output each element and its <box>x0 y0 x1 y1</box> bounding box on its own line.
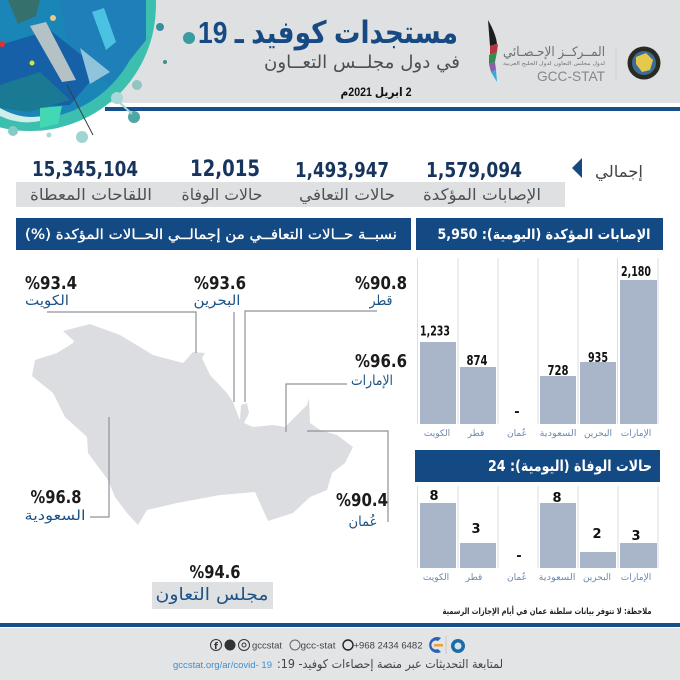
bar chart: daily deaths: البحرين <box>583 573 611 583</box>
stat: vaccines: 15,345,104 <box>32 157 138 181</box>
map: GCC countries <box>32 324 353 525</box>
bar chart: daily confirmed cases: الكويت <box>424 429 450 439</box>
footer: link line <box>173 657 503 672</box>
bar chart: daily confirmed cases <box>418 258 658 439</box>
label: Kuwait: %93.4 <box>25 273 77 294</box>
bar chart: daily deaths: 8 <box>552 491 562 506</box>
leader lines <box>47 311 388 522</box>
panel heading: daily cases <box>416 218 663 250</box>
footer: link line: gccstat.org/ar/covid- 19 <box>173 660 272 671</box>
label: GCC total: مجلس التعاون <box>156 585 268 605</box>
date: 2 ابريل 2021م <box>340 85 412 100</box>
bar chart: daily confirmed cases: 728 <box>548 364 568 379</box>
label: Oman <box>336 490 388 530</box>
footer: contact line <box>252 640 422 652</box>
logo: GCC-STAT ribbon <box>488 20 498 82</box>
panel heading: daily deaths <box>415 450 660 482</box>
footer: social icons <box>210 640 353 652</box>
totals label <box>572 158 643 182</box>
label: UAE: %96.6 <box>355 351 407 372</box>
stat: vaccines <box>30 157 152 204</box>
bar chart: daily confirmed cases: - <box>514 405 520 420</box>
label: Qatar: %90.8 <box>355 273 407 294</box>
bar chart: daily deaths: قطر <box>465 573 482 583</box>
bar chart: daily deaths: السعودية <box>538 573 576 583</box>
subtitle: في دول مجلــس التعــاون <box>264 52 460 73</box>
label: Oman: عُمان <box>348 514 378 530</box>
totals grey band <box>16 182 565 207</box>
bar chart: daily deaths: 3 <box>631 529 641 544</box>
bar chart: daily deaths: عُمان <box>507 572 527 583</box>
bar chart: daily deaths <box>418 486 658 583</box>
label: Saudi Arabia: السعودية <box>24 508 86 524</box>
bar chart: daily deaths: 8 <box>429 489 439 504</box>
bar chart: daily confirmed cases: 935 <box>588 351 608 366</box>
bar chart: daily deaths: الإمارات <box>621 573 651 583</box>
bar chart: daily deaths: الكويت <box>423 573 449 583</box>
label: UAE: الإمارات <box>351 373 393 389</box>
label: Bahrain: %93.6 <box>194 273 246 294</box>
bar chart: daily deaths: - <box>516 549 522 564</box>
stat: confirmed: الإصابات المؤكدة <box>423 185 541 205</box>
footer: contact line: gcc-stat <box>300 640 336 652</box>
label: UAE <box>351 351 407 389</box>
logo: GCC-STAT text: المــركــز الإحـصـائي <box>503 45 605 60</box>
label: Bahrain: البحرين <box>194 293 240 309</box>
stat: deaths <box>182 157 262 205</box>
bar chart: daily confirmed cases: السعودية <box>540 429 576 439</box>
bar chart: daily confirmed cases: 874 <box>466 354 488 369</box>
label: Kuwait: الكويت <box>25 293 69 309</box>
stat: recovered: 1,493,947 <box>295 158 389 182</box>
stat: deaths: 12,015 <box>190 157 260 182</box>
stat: confirmed: 1,579,094 <box>426 158 522 182</box>
bar chart: daily confirmed cases: عُمان <box>507 428 527 439</box>
footer: contact line: gccstat <box>252 640 282 652</box>
header image: globe with syringe <box>0 0 195 143</box>
label: Oman: %90.4 <box>336 490 388 511</box>
stat: deaths: حالات الوفاة <box>182 185 262 205</box>
bar chart: daily confirmed cases: البحرين <box>584 429 612 439</box>
bar chart: daily deaths: 3 <box>471 522 481 537</box>
stat: confirmed <box>423 158 541 205</box>
bar chart: daily confirmed cases: الإمارات <box>621 429 651 439</box>
logo: GCC-STAT text: GCC-STAT <box>537 68 605 84</box>
bar chart: daily confirmed cases: 2,180 <box>621 265 651 280</box>
label: Kuwait <box>25 273 77 309</box>
footer: contact line: +968 2434 6482 <box>354 640 422 652</box>
bar chart: daily deaths: 2 <box>592 527 602 542</box>
label: Saudi Arabia <box>24 487 86 524</box>
logo: GCC-STAT text: لدول مجلس التعاون لدول الخليج العربية <box>503 61 606 67</box>
stat: vaccines: اللقاحات المعطاة <box>30 185 152 204</box>
logo: GCC emblem <box>616 46 660 81</box>
footer band <box>0 623 680 680</box>
stat: recovered <box>295 158 395 205</box>
totals label: إجمالي <box>595 162 643 182</box>
bar chart: daily confirmed cases: 1,233 <box>420 324 450 340</box>
panel heading: recovery rate <box>16 218 411 250</box>
label: Qatar <box>355 273 407 309</box>
label: Bahrain <box>194 273 246 309</box>
header band <box>0 0 680 111</box>
bar chart: daily confirmed cases: قطر <box>467 429 484 439</box>
logo: GCC-STAT text <box>503 45 606 84</box>
label: Qatar: قطر <box>369 293 392 309</box>
title: مستجدات كوفيد ـ 19 <box>198 15 458 51</box>
footer: logos <box>429 636 465 654</box>
label: GCC total: %94.6 <box>190 562 240 583</box>
panel heading: daily cases: الإصابات المؤكدة (اليومية): 5,950 <box>438 227 650 243</box>
panel heading: daily deaths: حالات الوفاة (اليومية): 24 <box>488 457 652 475</box>
stat: recovered: حالات التعافي <box>299 185 395 205</box>
label: Saudi Arabia: %96.8 <box>30 487 82 508</box>
footer: link line: لمتابعة التحديثات عبر منصة إحصاءات كوفيد- 19: <box>277 657 503 672</box>
panel heading: recovery rate: نسبــة حــالات التعافــي من إجمالــي الحــالات المؤكدة (%) <box>25 227 397 243</box>
label: GCC total <box>152 562 273 609</box>
footer: social icons: f <box>214 642 218 652</box>
